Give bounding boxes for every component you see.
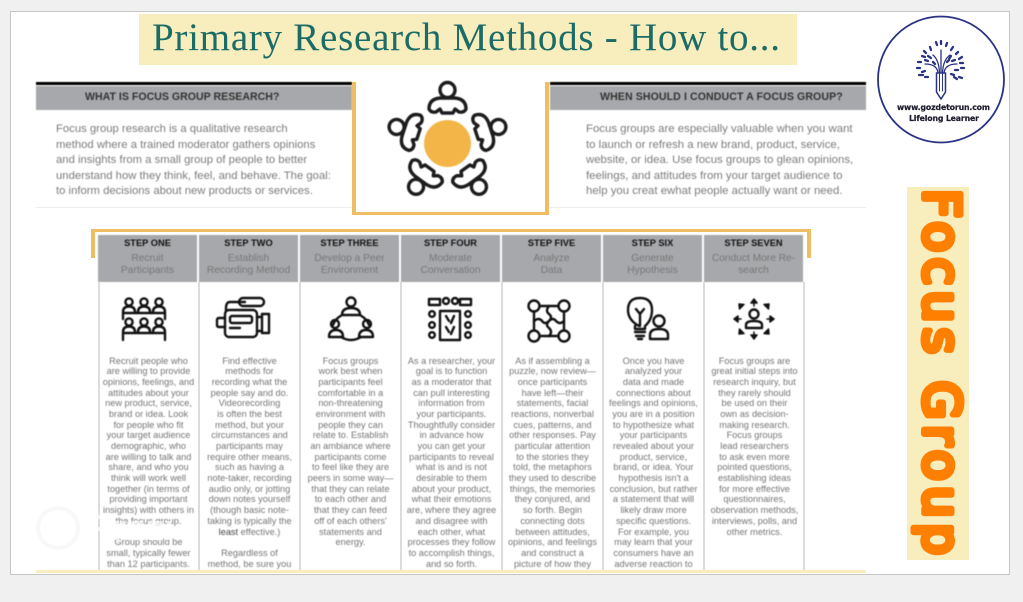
step one text: new product, service, — [105, 398, 192, 408]
step one header — [98, 235, 197, 282]
step four header: STEP FOUR — [424, 238, 477, 248]
step one text: share, and who you — [108, 462, 189, 472]
step seven text: other metrics. — [727, 526, 782, 536]
step three text: peers in some way— — [308, 473, 393, 483]
step two text — [207, 356, 292, 570]
step five text: puzzle, now review— — [509, 366, 596, 376]
step five text: opinions, and feelings — [508, 537, 597, 547]
step four text — [406, 356, 496, 569]
step six header: Hypothesis — [627, 265, 678, 276]
step two text: down notes yourself — [209, 494, 290, 504]
text: what is: method where a trained moderator gathers opinions — [56, 138, 315, 150]
step three text: environment with — [316, 409, 385, 419]
step three text: statements and — [319, 526, 382, 536]
step two header: STEP TWO — [224, 238, 273, 248]
step seven text: research inquiry, but — [713, 377, 796, 387]
text: when — [586, 123, 853, 197]
step four text: and disagree with — [415, 516, 488, 526]
step six text — [608, 356, 698, 569]
step two text: (though basic note- — [210, 505, 289, 515]
step two text: taking is typically the — [207, 516, 292, 526]
step six header: STEP SIX — [632, 238, 673, 248]
step five header: Data — [541, 265, 562, 276]
step four text: each other, what — [418, 526, 485, 536]
step seven text: pointed questions, — [717, 462, 792, 472]
step three header: Develop a Peer — [314, 253, 385, 264]
step one text: providing important — [109, 494, 188, 504]
step five text: other responses. Pay — [509, 430, 596, 440]
step two header: Recording Method — [207, 265, 290, 276]
step seven header — [704, 235, 803, 282]
text: when: to launch or refresh a new brand, product, service, — [586, 138, 840, 150]
icon: moderated notes — [426, 296, 473, 342]
center orange frame — [352, 82, 549, 215]
step three text: relate to. Establish — [313, 430, 388, 440]
step five text: once participants — [518, 377, 587, 387]
step headers — [98, 234, 804, 282]
step five header: STEP FIVE — [528, 238, 575, 248]
step five text: things, the memories — [510, 484, 595, 494]
step two text: recording what the — [212, 377, 287, 387]
step four text: what their emotions — [412, 494, 491, 504]
step two text: people say and do. — [211, 388, 288, 398]
step six text: your participants — [620, 430, 687, 440]
step seven text: lead researchers — [720, 441, 789, 451]
text: what is: to inform decisions about new products or services. — [56, 185, 313, 197]
step five text: particular attention — [515, 441, 590, 451]
step six text: product, service, — [620, 452, 687, 462]
step one text: the focus group. — [116, 516, 181, 526]
step one text: together (in terms of — [107, 484, 190, 494]
step three text: non-threatening — [318, 398, 383, 408]
step six text: revealed about your — [613, 441, 694, 451]
text: when: Focus groups are especially valuable when you want — [586, 123, 853, 135]
step one header: STEP ONE — [124, 238, 171, 248]
icon: audience rows — [120, 296, 167, 342]
step three header — [300, 235, 399, 282]
step three text: comfortable in a — [318, 388, 383, 398]
step two text: method, be sure you — [208, 559, 291, 569]
step six text: connections about — [616, 388, 691, 398]
step one text: small, typically fewer — [106, 548, 191, 558]
step five header: Analyze — [533, 253, 570, 264]
panel: what is focus group research — [35, 81, 352, 197]
text: what is: Focus group research is a qualitative research — [56, 123, 288, 135]
heading bar: what is: WHAT IS FOCUS GROUP RESEARCH? — [85, 91, 279, 103]
heading bar: when: WHEN SHOULD I CONDUCT A FOCUS GROUP? — [600, 91, 843, 103]
step seven text: interviews, polls, and — [712, 516, 797, 526]
step five text: between attitudes, — [515, 526, 590, 536]
step four text: As a researcher, your — [408, 356, 495, 366]
step two text: circumstances and — [211, 430, 288, 440]
step three text: participants feel — [318, 377, 383, 387]
bottom cream rule — [36, 570, 866, 573]
text: what is: understand how they think, feel, and behave. The goal: — [56, 170, 331, 182]
text: what is: and insights from a small group of people to better — [56, 154, 307, 166]
logo badge: Lifelong Learner — [909, 114, 979, 123]
step six text: adverse reaction to — [614, 559, 693, 569]
icon: light bulb and person — [626, 296, 670, 342]
step four text: to accomplish things, — [409, 548, 494, 558]
step five text: reactions, nonverbal — [511, 409, 594, 419]
step four text: and so forth. — [426, 559, 477, 569]
step two text: method, but your — [215, 420, 284, 430]
step five text: told, the metaphors — [513, 462, 592, 472]
step three text: an ambiance where — [310, 441, 391, 451]
step six text: specific questions. — [616, 516, 691, 526]
step four header: Conversation — [420, 265, 481, 276]
step seven text: be used on their — [722, 398, 787, 408]
step two text: participants may — [216, 441, 283, 451]
step seven header: Conduct More Re- — [712, 253, 795, 264]
step four text: about your product, — [412, 484, 491, 494]
step five text: connecting dots — [520, 516, 585, 526]
title band — [139, 14, 797, 65]
step five text: have left—their — [522, 388, 583, 398]
step four text: goal is to function — [416, 366, 487, 376]
step seven header: search — [738, 265, 769, 276]
step one text: your target audience — [107, 430, 190, 440]
step six text: likely draw more — [620, 505, 687, 515]
step three header: STEP THREE — [320, 238, 379, 248]
panel: steps table — [98, 234, 804, 282]
step five text — [508, 356, 598, 570]
step two text: such as having a — [215, 462, 284, 472]
step five text: they conjured, and — [515, 494, 590, 504]
step two text: Videorecording — [219, 398, 280, 408]
step one text: than 12 participants. — [107, 559, 190, 569]
step five text: they used to describe — [509, 473, 596, 483]
heading bar: when — [549, 81, 867, 110]
step six text: may learn that your — [614, 537, 693, 547]
step four header — [401, 235, 500, 282]
step two text: Regardless of — [221, 548, 278, 558]
step seven text: they rarely should — [718, 388, 791, 398]
step two text: audio only, or jotting — [209, 484, 290, 494]
icon: puzzle network — [526, 298, 572, 344]
text: when: help you creat ewhat people actually want or need. — [586, 185, 842, 197]
step six text: hypothesis isn't a — [618, 473, 689, 483]
step four text: what is and is not — [416, 462, 487, 472]
step one text: opinions, feelings, and — [103, 377, 194, 387]
step seven text: for more effective — [719, 484, 790, 494]
step seven text: Focus groups are — [719, 356, 790, 366]
step two text: is often the best — [217, 409, 282, 419]
step four text: as a moderator that — [412, 377, 491, 387]
steps orange bracket — [91, 229, 811, 258]
side band — [907, 187, 969, 560]
step five text: statements, facial — [517, 398, 588, 408]
step three text: work best when — [319, 366, 382, 376]
step six text: a statement that will — [613, 494, 694, 504]
step one text — [102, 356, 194, 570]
step four text: in advance how — [420, 430, 483, 440]
text: when: feelings, and attitudes from your target audience to — [586, 170, 842, 182]
step seven text: great initial steps into — [711, 366, 798, 376]
step five text: picture of how they — [514, 559, 591, 569]
step four text: Thoughtfully consider — [408, 420, 495, 430]
step seven text: observation methods, — [711, 505, 798, 515]
step one text: brand or idea. Look — [109, 409, 188, 419]
heading bar: what is — [35, 81, 352, 110]
step three text: off of each others' — [314, 516, 387, 526]
step four text: are, where they agree — [407, 505, 496, 515]
step one header: Recruit — [131, 253, 164, 264]
step seven text: Focus groups — [727, 430, 782, 440]
step four text: you can get your — [418, 441, 485, 451]
step five text: to the stories they — [516, 452, 589, 462]
step seven text: questionnaires, — [723, 494, 786, 504]
step one text: think will work well — [111, 473, 186, 483]
step three text: people they can — [318, 420, 383, 430]
step seven text: establishing ideas — [718, 473, 791, 483]
step five text: As if assembling a — [515, 356, 590, 366]
step four text: processes they follow — [408, 537, 495, 547]
logo badge: www.gozdetorun.com — [897, 103, 990, 112]
step seven header: STEP SEVEN — [724, 238, 783, 248]
text: when: website, or idea. Use focus groups to glean opinions, — [586, 154, 853, 166]
step one text: demographic, who — [111, 441, 186, 451]
icon: person with arrows — [732, 298, 776, 340]
step four text: your participants. — [417, 409, 486, 419]
step five header — [502, 235, 601, 282]
step two text: require other means, — [207, 452, 292, 462]
step three header: Environment — [321, 265, 378, 276]
step three text: to feel like they are — [312, 462, 389, 472]
step three text: that they can feed — [314, 505, 387, 515]
step six text: conclusion, but rather — [610, 484, 697, 494]
step seven text: making research. — [719, 420, 790, 430]
step four text: participants to reveal — [409, 452, 494, 462]
step one text: for people who fit — [114, 420, 183, 430]
step two text: least effective.) — [219, 526, 280, 536]
logo badge — [877, 16, 1005, 144]
icon: five people around a table — [386, 80, 508, 197]
pencil — [936, 73, 946, 99]
step two header: Establish — [228, 253, 269, 264]
step one text: insights) with others in — [103, 505, 194, 515]
step six text: For example, you — [618, 526, 689, 536]
watermark: Prezi: Prezi — [88, 507, 174, 548]
step seven text: own as decision- — [720, 409, 789, 419]
text: what is — [56, 123, 331, 197]
step four header: Moderate — [429, 253, 472, 264]
step four text: can pull interesting — [413, 388, 490, 398]
step four text: desirable to them — [416, 473, 487, 483]
step six text: feelings and opinions, — [609, 398, 698, 408]
step three text: participants come — [314, 452, 386, 462]
step three text — [308, 356, 394, 548]
step two text: note-taker, recording — [207, 473, 292, 483]
step three text: Focus groups — [323, 356, 378, 366]
step two text: Find effective — [222, 356, 277, 366]
step six text: brand, or idea. Your — [613, 462, 694, 472]
step five text: cues, patterns, and — [513, 420, 592, 430]
step six text: you are in a position — [612, 409, 695, 419]
step seven text: to ask even more — [719, 452, 790, 462]
panel: when to conduct — [549, 81, 867, 197]
step six text: analyzed your — [625, 366, 682, 376]
side label: Focus Group: Focus Group — [912, 189, 970, 555]
step six text: Once you have — [623, 356, 684, 366]
step three text: to each other and — [315, 494, 386, 504]
step one text: attitudes about your — [108, 388, 189, 398]
step two text: methods for — [225, 366, 274, 376]
step three text: energy. — [336, 537, 365, 547]
step six text: data and made — [623, 377, 684, 387]
step one text: are willing to provide — [107, 366, 190, 376]
step one text: Recruit people who — [109, 356, 188, 366]
title: Primary Research Methods - How to... — [152, 16, 780, 59]
step seven text — [710, 356, 798, 536]
step one text: Group should be — [115, 537, 182, 547]
step one text: are willing to talk and — [106, 452, 191, 462]
step one header: Participants — [121, 265, 174, 276]
step five text: so forth. Begin — [523, 505, 582, 515]
icon: three people circle — [327, 296, 375, 342]
step six text: consumers have an — [613, 548, 694, 558]
step three text: that they can relate — [311, 484, 390, 494]
icon: video camera — [214, 296, 271, 340]
step six text: to hypothesize what — [613, 420, 694, 430]
step six header: Generate — [631, 253, 674, 264]
step two header — [199, 235, 298, 282]
step four text: information from — [418, 398, 485, 408]
step six header — [603, 235, 702, 282]
step five text: and construct a — [521, 548, 584, 558]
